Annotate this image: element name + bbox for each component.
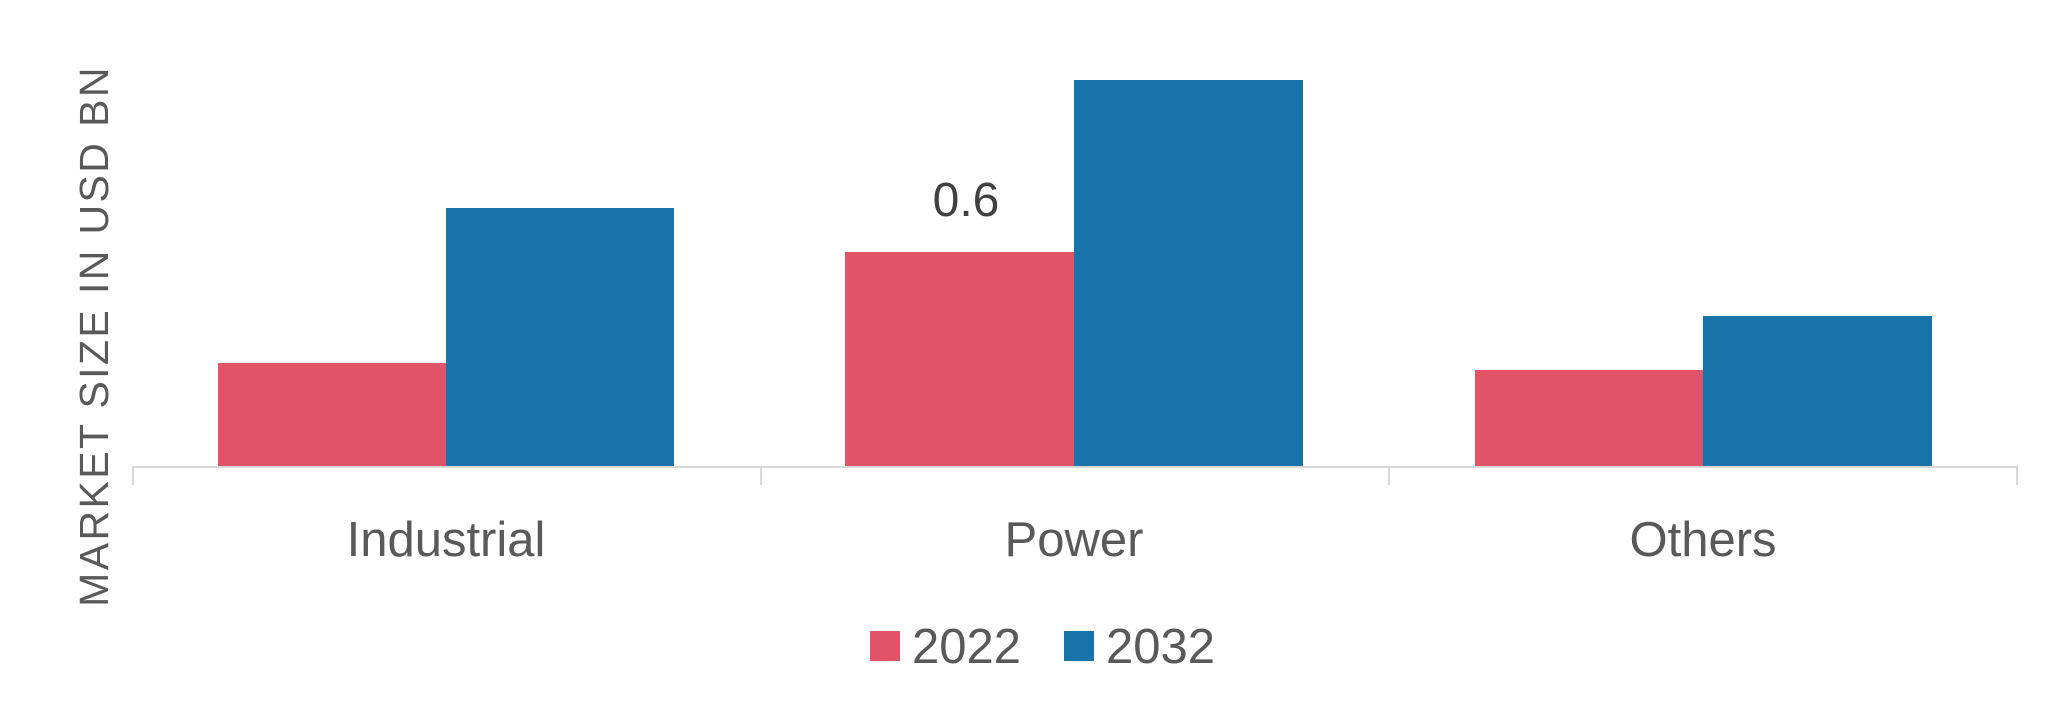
- y axis title: MARKET SIZE IN USD BN: [71, 65, 117, 607]
- legend: 2022: [912, 620, 1021, 674]
- bar: Power 2022: [845, 252, 1074, 467]
- legend: [870, 620, 1215, 674]
- category labels: [347, 513, 1777, 567]
- bar: Others 2032: [1703, 316, 1932, 467]
- bar: Others 2022: [1475, 370, 1703, 467]
- category labels: Others: [1629, 513, 1777, 567]
- bar: Industrial 2022: [218, 363, 446, 467]
- category labels: Industrial: [347, 513, 545, 567]
- data label: 0.6: [933, 174, 999, 227]
- bar: Industrial 2032: [446, 208, 674, 467]
- legend: 2032: [1106, 620, 1215, 674]
- x axis: [132, 467, 2018, 485]
- bar: Power 2032: [1074, 80, 1303, 467]
- category labels: Power: [1005, 513, 1143, 567]
- bar chart: [132, 80, 2018, 485]
